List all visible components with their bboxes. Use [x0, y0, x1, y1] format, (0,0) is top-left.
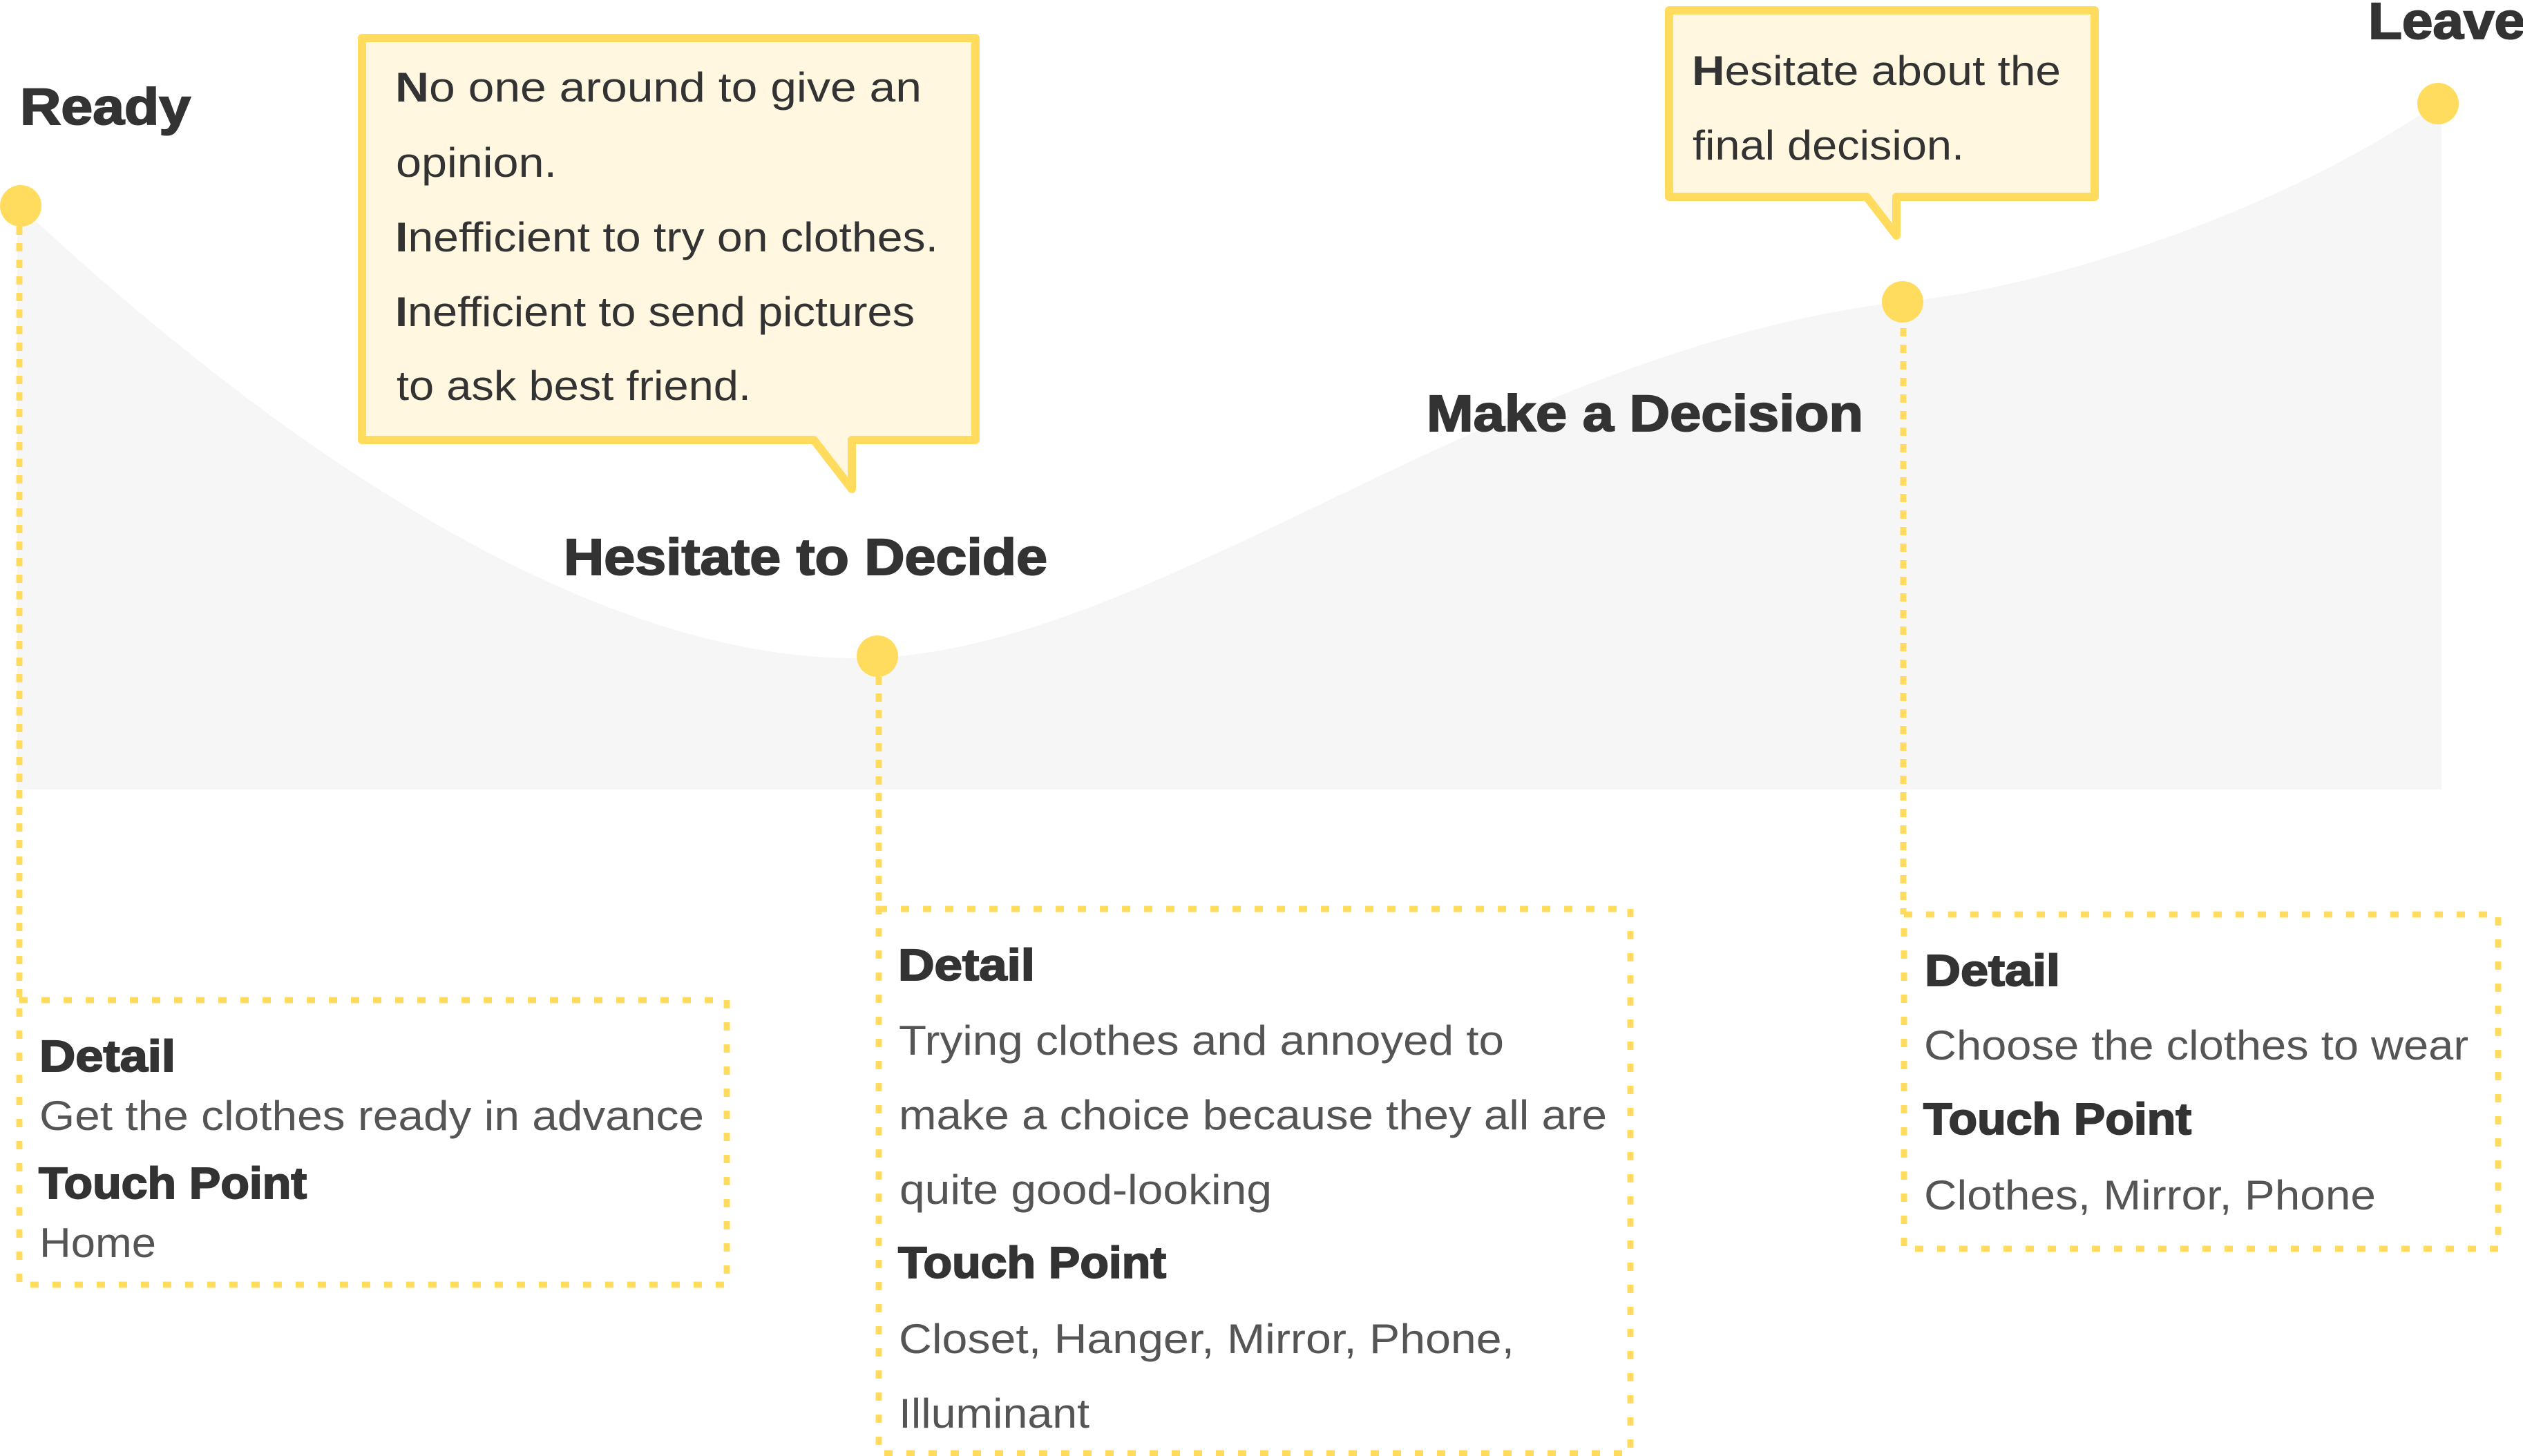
panel border [1904, 914, 2498, 1249]
callout bubble [1669, 10, 2095, 236]
label: Detail: Detail [898, 940, 1035, 990]
callout text [395, 64, 938, 409]
text: detail body [899, 1017, 1607, 1213]
heading: Make a Decision: Make a Decision [1427, 385, 1863, 442]
callout text: final decision. [1693, 122, 1964, 169]
panel: Ready details [19, 1000, 727, 1285]
connector: Hesitate to Decide to detail box [876, 677, 882, 909]
connector: Make a Decision to detail box [1900, 328, 1907, 914]
callout: pain points at Hesitate to Decide [362, 38, 975, 489]
panel border [879, 909, 1630, 1453]
text: detail body: make a choice because they all are [899, 1092, 1607, 1138]
text: touch point body: Illuminant [899, 1390, 1089, 1437]
callout text [1692, 48, 2061, 169]
text: detail body: Get the clothes ready in advance [39, 1093, 704, 1139]
label: Touch Point: Touch Point [898, 1238, 1166, 1287]
heading: Hesitate to Decide: Hesitate to Decide [564, 528, 1047, 586]
callout text: Hesitate about the [1692, 48, 2061, 94]
point: Make a Decision [1882, 281, 1923, 323]
text: touch point body: Clothes, Mirror, Phone [1924, 1172, 2376, 1218]
text: detail body: quite good-looking [899, 1167, 1272, 1213]
text: detail body: Choose the clothes to wear [1924, 1022, 2468, 1069]
panel border [19, 1000, 727, 1285]
text: touch point body [899, 1316, 1514, 1437]
text: detail body: Trying clothes and annoyed to [899, 1017, 1504, 1064]
text: touch point body: Home [39, 1220, 156, 1266]
label: Touch Point: Touch Point [39, 1158, 307, 1208]
label: Touch Point: Touch Point [1923, 1094, 2191, 1144]
point: Ready [0, 185, 41, 227]
callout: pain point at Make a Decision [1669, 10, 2095, 236]
text: touch point body: Closet, Hanger, Mirror, Phone, [899, 1316, 1514, 1362]
label: Detail: Detail [39, 1031, 175, 1081]
area chart: journey curve [17, 100, 2441, 789]
label: Detail: Detail [1925, 946, 2060, 995]
panel: Hesitate to Decide details [879, 909, 1630, 1453]
callout bubble [362, 38, 975, 489]
point: Leave [2417, 83, 2459, 124]
connector: Ready to detail box [17, 227, 22, 1000]
callout text: Inefficient to send pictures [395, 289, 915, 335]
heading: Ready: Ready [20, 78, 191, 135]
callout text: Inefficient to try on clothes. [395, 214, 938, 260]
callout text: opinion. [396, 140, 557, 186]
panel: Make a Decision details [1904, 914, 2498, 1249]
callout text: No one around to give an [395, 64, 922, 111]
point: Hesitate to Decide [857, 635, 898, 677]
callout text: to ask best friend. [397, 363, 751, 409]
